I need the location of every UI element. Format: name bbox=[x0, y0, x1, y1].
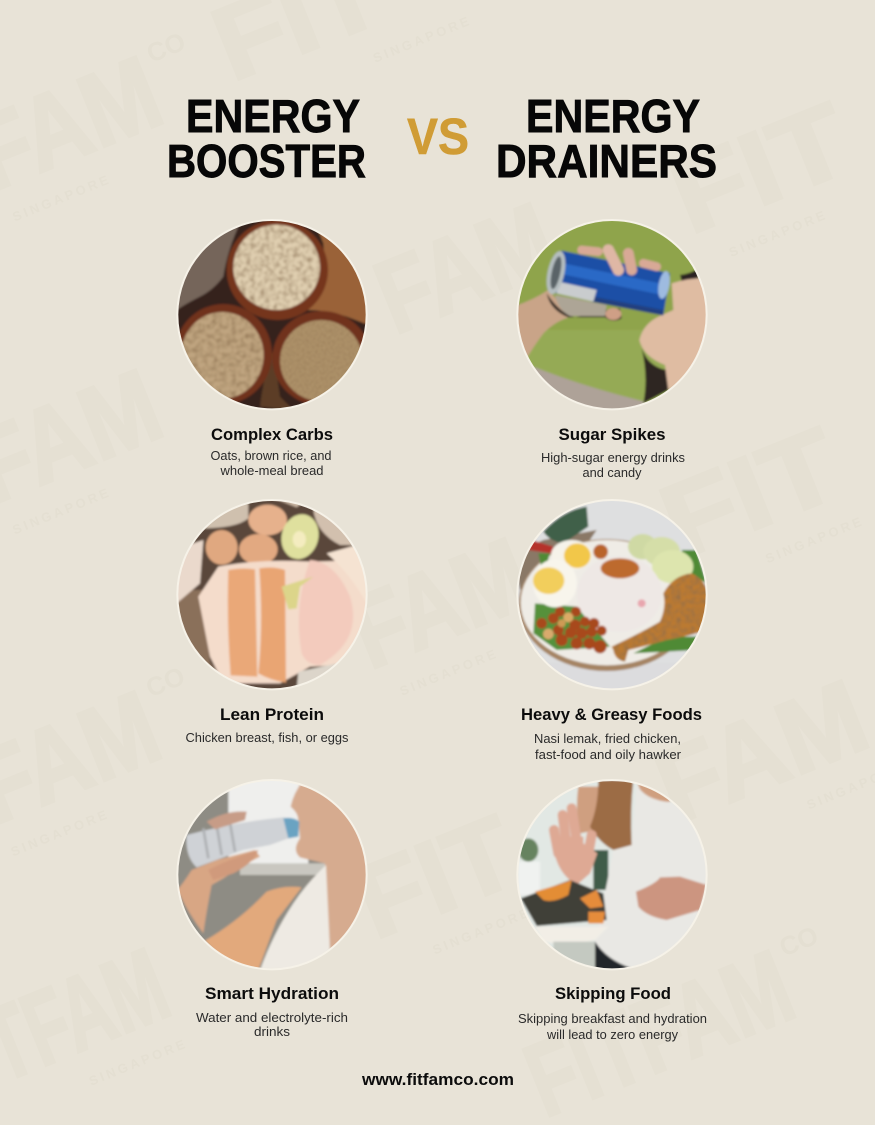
heading: Heavy & Greasy Foods bbox=[521, 705, 702, 724]
watermark pattern: SINGAPORE bbox=[10, 484, 113, 537]
heading: Smart Hydration bbox=[205, 984, 339, 1003]
title: energy drainers: DRAINERS bbox=[496, 135, 717, 187]
description: Water and electrolyte-rich bbox=[196, 1011, 348, 1025]
watermark pattern: SINGAPORE bbox=[10, 171, 113, 224]
watermark pattern: FIT bbox=[340, 794, 532, 961]
description bbox=[196, 1011, 348, 1039]
panel: smart hydration bbox=[173, 777, 373, 1039]
photo: salmon, chicken and eggs bbox=[173, 497, 373, 697]
watermark pattern: SINGAPORE bbox=[9, 806, 112, 859]
description: fast-food and oily hawker bbox=[535, 748, 681, 762]
description: Oats, brown rice, and bbox=[210, 449, 332, 463]
heading: Complex Carbs bbox=[211, 425, 333, 444]
description bbox=[541, 451, 685, 480]
watermark pattern: SINGAPORE bbox=[520, 271, 623, 324]
watermark pattern: SINGAPORE bbox=[398, 645, 501, 699]
watermark pattern: SINGAPORE bbox=[87, 1035, 190, 1089]
photo: refusing food bbox=[513, 777, 713, 977]
description: Skipping breakfast and hydration bbox=[518, 1012, 707, 1026]
title: energy booster: ENERGY bbox=[186, 90, 360, 142]
description: Chicken breast, fish, or eggs bbox=[186, 731, 348, 745]
watermark pattern: FIT bbox=[655, 81, 866, 256]
panel: heavy and greasy foods bbox=[513, 497, 713, 762]
heading: Lean Protein bbox=[220, 705, 324, 724]
title: energy drainers: ENERGY bbox=[526, 90, 700, 142]
panel: complex carbs bbox=[173, 217, 373, 478]
title: energy booster bbox=[167, 90, 366, 187]
description bbox=[518, 1012, 707, 1042]
photo: bowls of grains bbox=[173, 217, 373, 417]
watermark pattern: FIT bbox=[645, 406, 856, 581]
watermark pattern: CO bbox=[142, 661, 189, 703]
description: whole-meal bread bbox=[219, 464, 324, 478]
watermark pattern: CO bbox=[775, 920, 822, 962]
description: Nasi lemak, fried chicken, bbox=[534, 732, 681, 746]
description: drinks bbox=[254, 1025, 290, 1039]
watermark pattern: SINGAPORE bbox=[371, 12, 474, 66]
description bbox=[534, 732, 681, 762]
title: energy booster: BOOSTER bbox=[167, 135, 366, 187]
photo: drinking from a can bbox=[513, 217, 713, 417]
description bbox=[210, 449, 332, 478]
versus label: VS bbox=[407, 108, 469, 165]
watermark pattern: CO bbox=[142, 26, 190, 69]
watermark pattern: SINGAPORE bbox=[763, 513, 866, 566]
watermark pattern: FAM bbox=[335, 516, 546, 691]
photo: nasi lemak plate bbox=[513, 497, 713, 697]
photo: woman drinking water bbox=[173, 777, 373, 977]
panel: lean protein bbox=[173, 497, 373, 745]
panel: skipping food bbox=[513, 777, 713, 1042]
title: energy drainers bbox=[496, 90, 717, 187]
description: and candy bbox=[582, 466, 642, 480]
panel: sugar spikes bbox=[513, 217, 713, 480]
watermark pattern: FAM bbox=[360, 181, 571, 356]
watermark pattern: SINGAPORE bbox=[430, 904, 533, 957]
website footer: www.fitfamco.com bbox=[361, 1071, 514, 1089]
description: High-sugar energy drinks bbox=[541, 451, 685, 465]
watermark pattern: SINGAPORE bbox=[727, 207, 830, 260]
description: will lead to zero energy bbox=[546, 1028, 679, 1042]
heading: Sugar Spikes bbox=[558, 425, 666, 444]
heading: Skipping Food bbox=[555, 984, 671, 1003]
